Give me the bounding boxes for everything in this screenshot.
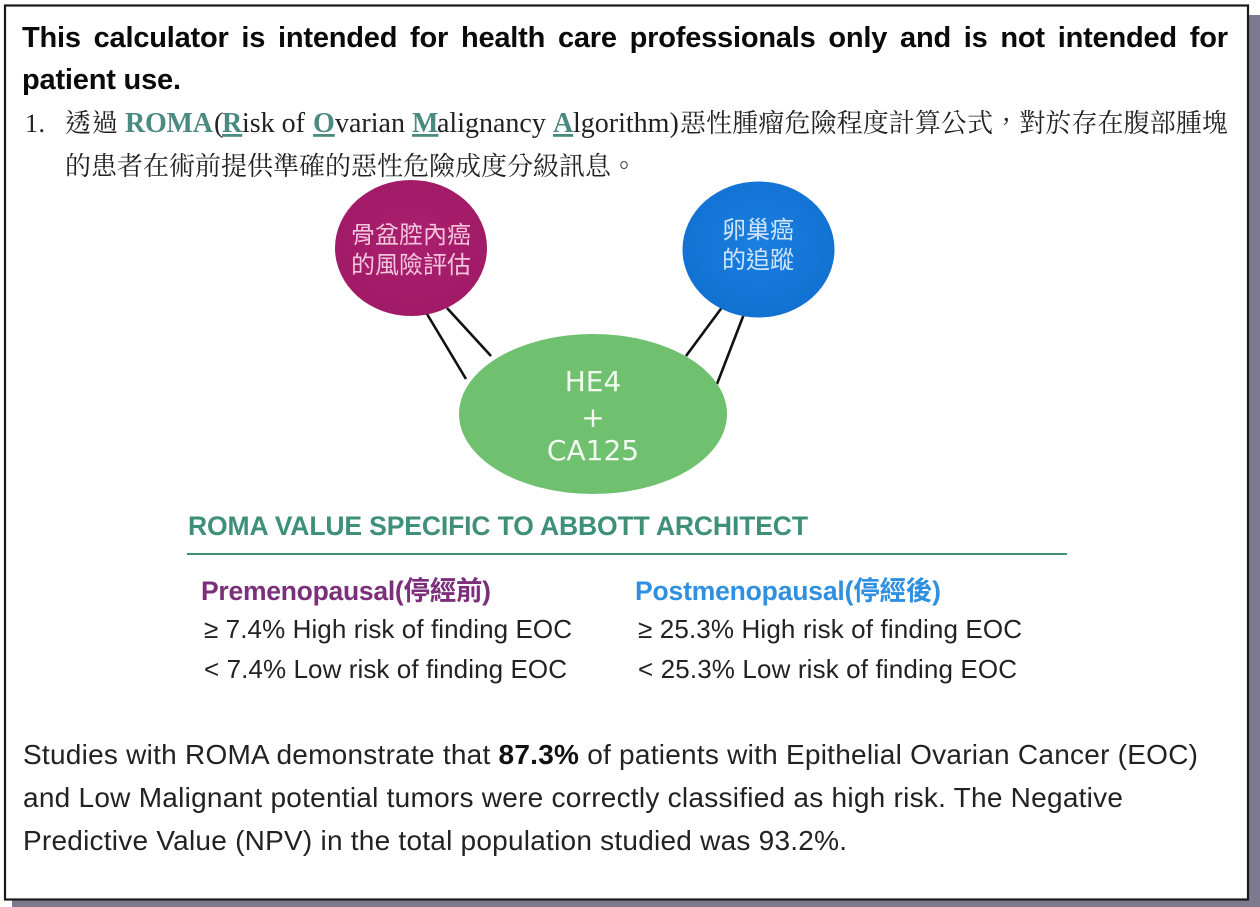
text block: ROMA introduction: ROMA [125,108,214,139]
heading: professional use notice: patient use. [22,64,181,96]
ellipse: HE4 + CA125 [459,334,727,494]
circle: ovarian cancer tracking: 的追蹤 [722,247,794,274]
text block: study results: Predictive Value (NPV) in the total population studied was 93.2%. [23,825,847,856]
heading: ROMA value: ROMA VALUE SPECIFIC TO ABBOTT ARCHITECT [188,511,808,541]
ellipse: HE4 + CA125: CA125 [547,434,639,467]
text block: ROMA introduction: 惡性腫瘤危險程度計算公式，對於存在腹部腫塊 [680,109,1228,138]
circle: ovarian cancer tracking [682,182,834,318]
circle: ovarian cancer tracking: 卵巢癌 [722,217,794,244]
heading: professional use notice: This calculator is intended for health care professionals only and is not intended for [22,22,1228,54]
ellipse: HE4 + CA125: HE4 [565,365,621,398]
text block: ROMA introduction: isk of [242,108,306,139]
connector lines: pelvic risk to markers [427,308,491,379]
column: premenopausal [201,576,572,684]
text block: ROMA introduction: varian [335,108,405,139]
text block: study results [23,739,1198,856]
text block: ROMA introduction: M [412,108,438,139]
text block: ROMA introduction: A [553,108,574,139]
text block: ROMA introduction: alignancy [437,108,546,139]
heading: professional use notice [22,22,1228,96]
column: premenopausal: ≥ 7.4% High risk of finding EOC [204,614,572,644]
text block: ROMA introduction: ( [214,108,223,139]
column: premenopausal: Premenopausal(停經前) [201,576,491,606]
text block: ROMA introduction: 透過 [65,109,118,138]
text block: ROMA introduction: lgorithm) [573,108,679,139]
text block: study results: Studies with ROMA demonstrate that 87.3% of patients with Epithelial Ovarian Cancer (EOC) [23,739,1198,770]
circle: pelvic cancer risk assessment: 的風險評估 [351,252,471,279]
circle: pelvic cancer risk assessment [335,180,487,316]
column: postmenopausal: ≥ 25.3% High risk of finding EOC [638,614,1022,644]
connector lines: ovarian tracking to markers [686,306,744,384]
circle: pelvic cancer risk assessment: 骨盆腔內癌 [351,222,471,249]
text block: study results: and Low Malignant potential tumors were correctly classified as high risk. The Negative [23,782,1123,813]
text block: ROMA introduction: O [313,108,335,139]
column: postmenopausal: Postmenopausal(停經後) [635,576,941,606]
column: premenopausal: < 7.4% Low risk of finding EOC [204,654,567,684]
text block: ROMA introduction [25,108,1228,181]
text block: ROMA introduction: 的患者在術前提供準確的惡性危險成度分級訊息。 [65,152,637,181]
diagram: markers and applications [335,180,834,494]
column: postmenopausal [635,576,1022,684]
ellipse: HE4 + CA125: + [581,401,605,434]
text block: ROMA introduction: 1. [25,109,45,138]
text block: ROMA introduction: R [222,108,243,139]
column: postmenopausal: < 25.3% Low risk of finding EOC [638,654,1017,684]
